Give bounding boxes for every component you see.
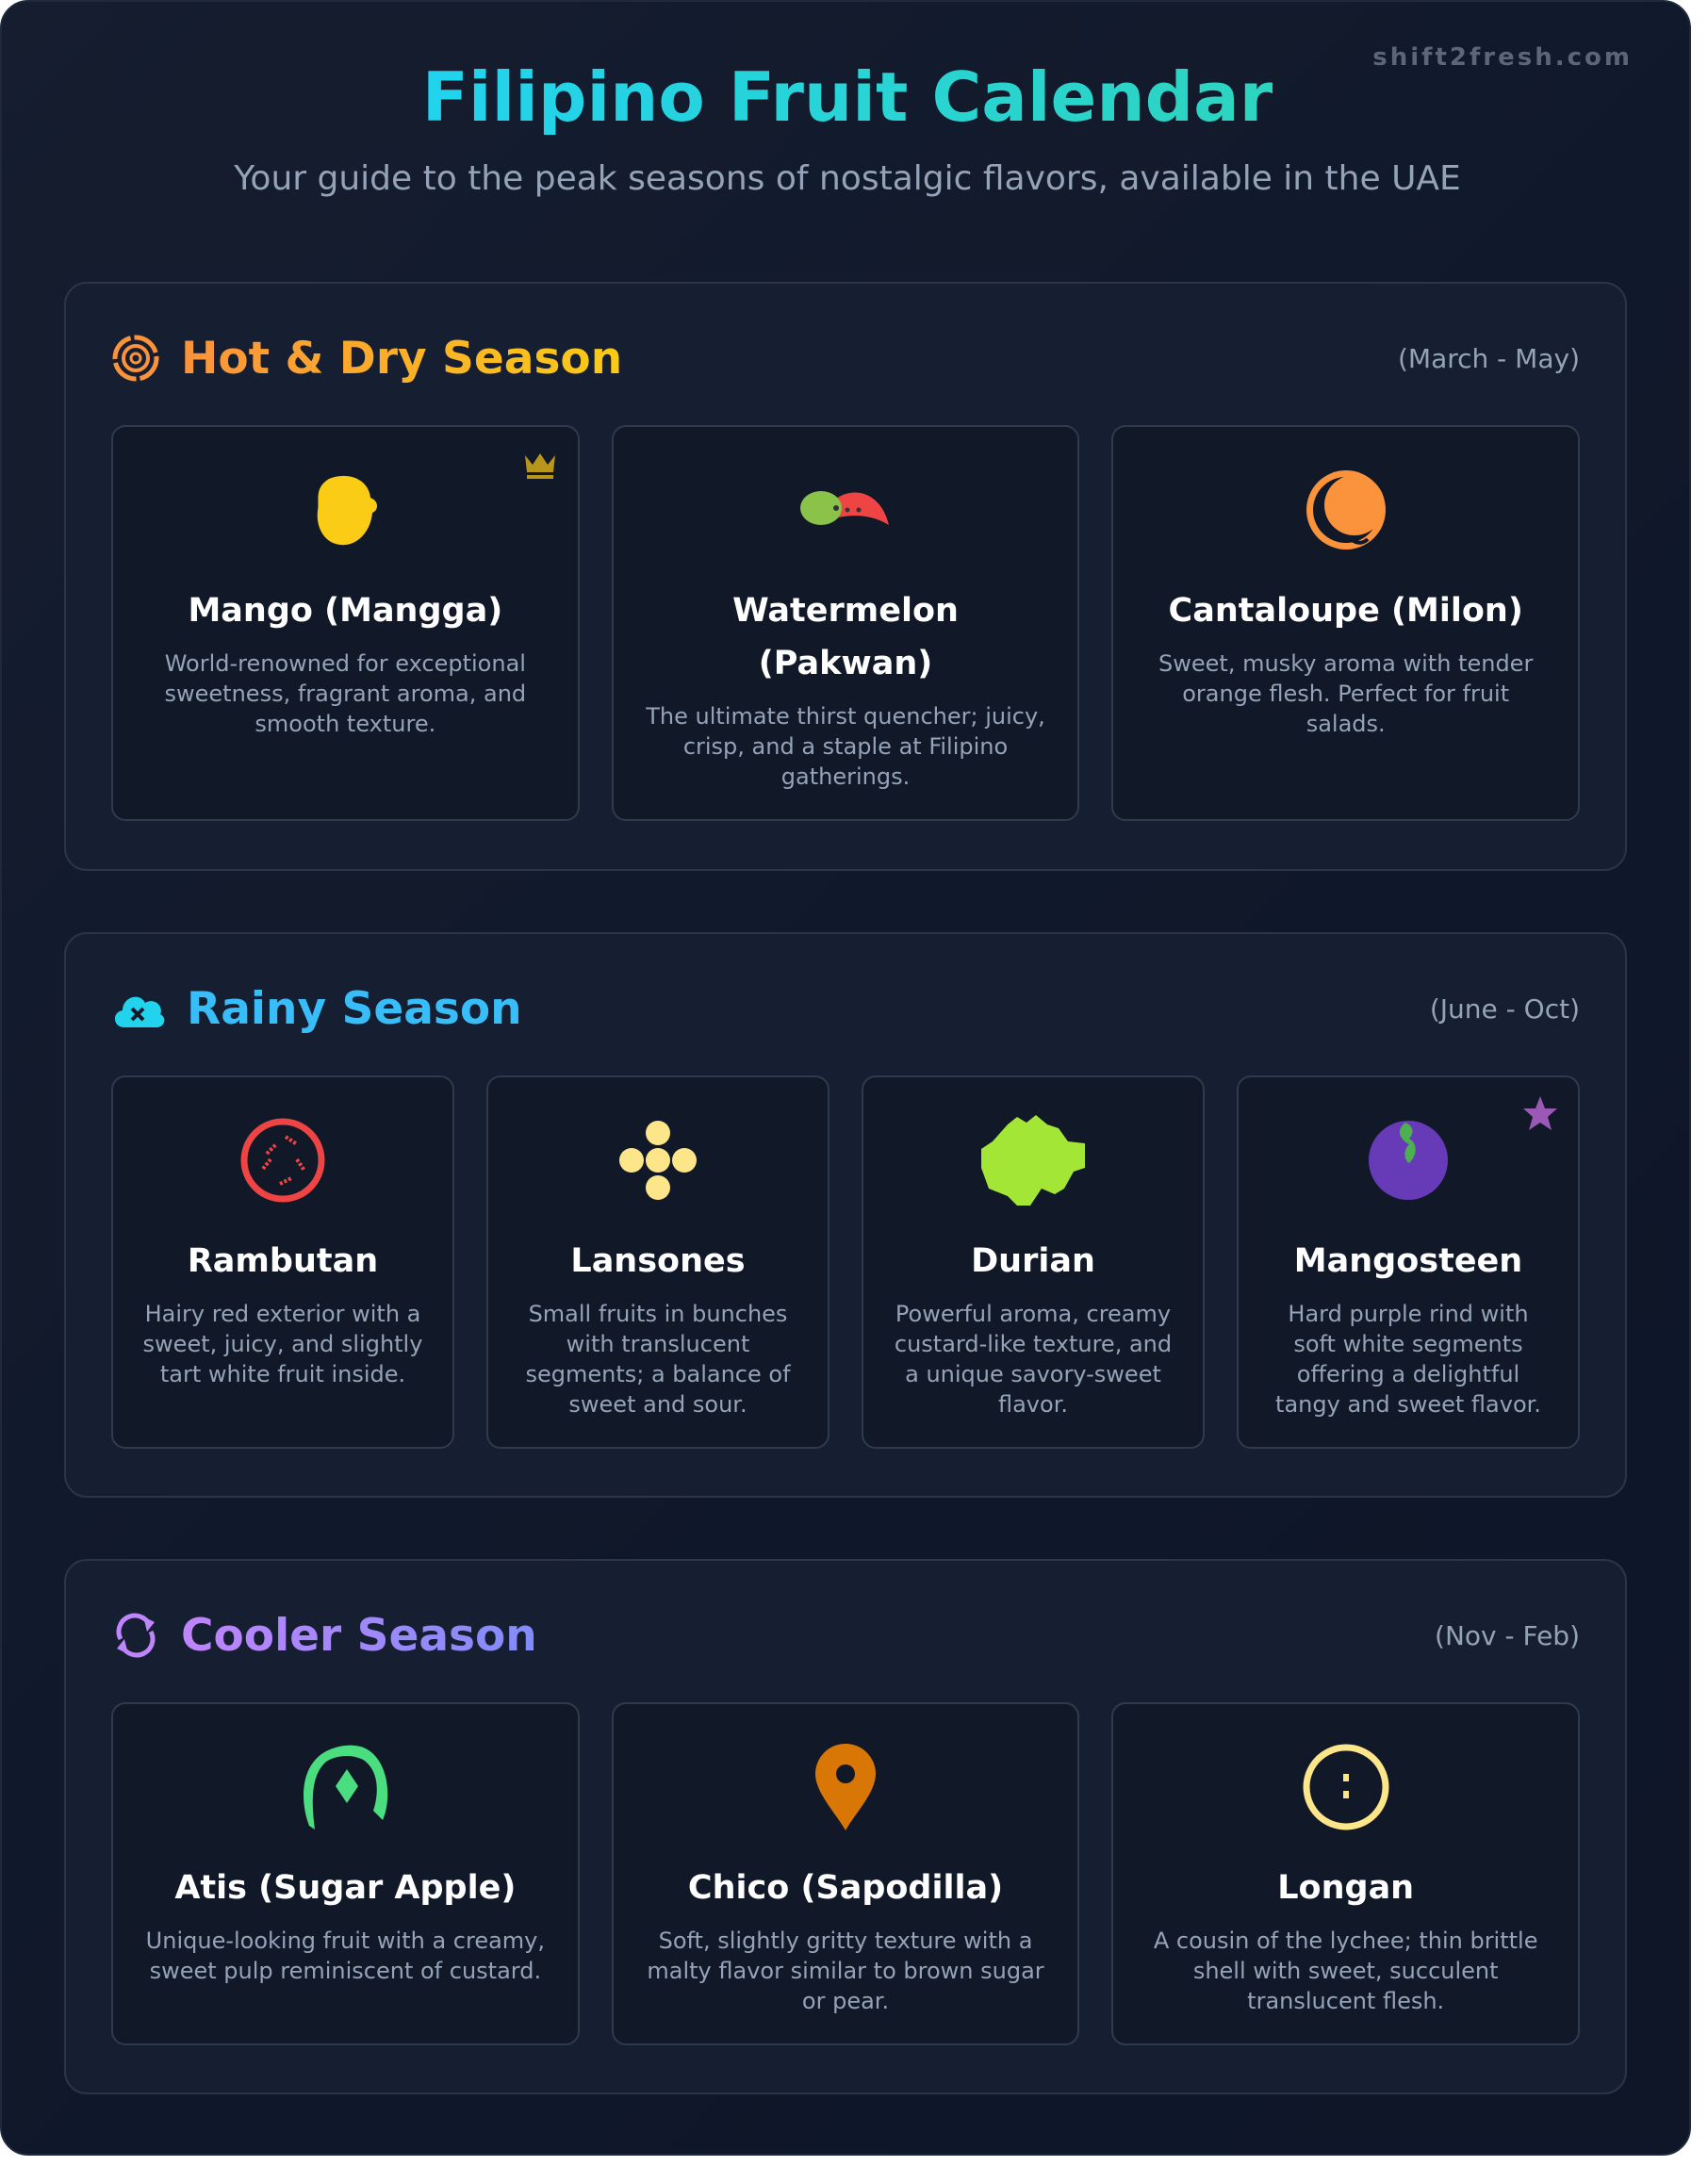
- icon: rambutan: [241, 1118, 324, 1203]
- card: watermelon: (Pakwan): [759, 645, 932, 682]
- panel: rainy season: [64, 932, 1627, 1498]
- card: mangosteen: Hard purple rind with soft white segments offering a delightful tangy and sweet flavor.: [1275, 1301, 1541, 1418]
- brand: shift2fresh.com: [1372, 43, 1633, 72]
- card: mangosteen: [1237, 1075, 1580, 1449]
- card: mangosteen: Mangosteen: [1294, 1242, 1522, 1280]
- card: longan: A cousin of the lychee; thin brittle shell with sweet, succulent translucent flesh.: [1154, 1928, 1537, 2014]
- panel: hot & dry season: [64, 282, 1627, 871]
- section header: hot & dry: (March - May): [1398, 343, 1580, 373]
- card: longan: Longan: [1277, 1869, 1414, 1907]
- section header: cooler: (Nov - Feb): [1435, 1619, 1580, 1651]
- card: durian: Durian: [971, 1242, 1095, 1280]
- card: mango: Mango (Mangga): [188, 592, 502, 630]
- icon: cloud: [115, 997, 164, 1027]
- card: longan: [1111, 1702, 1580, 2045]
- card: durian: [862, 1075, 1205, 1449]
- card: atis: [111, 1702, 580, 2045]
- card: atis: Unique-looking fruit with a creamy, sweet pulp reminiscent of custard.: [146, 1928, 545, 1984]
- card: mango: World-renowned for exceptional sweetness, fragrant aroma, and smooth texture.: [165, 650, 526, 737]
- card: durian: Powerful aroma, creamy custard-like texture, and a unique savory-sweet flavor.: [895, 1301, 1172, 1418]
- icon: star: [1523, 1096, 1557, 1130]
- card: lansones: [486, 1075, 829, 1449]
- card: cantaloupe: Cantaloupe (Milon): [1169, 592, 1523, 630]
- card: chico: Chico (Sapodilla): [688, 1869, 1003, 1907]
- cards row: hot & dry: [111, 425, 1580, 821]
- card: lansones: Lansones: [570, 1242, 746, 1280]
- card: watermelon: The ultimate thirst quencher; juicy, crisp, and a staple at Filipino gatherings.: [646, 703, 1045, 790]
- cards row: rainy: [111, 1075, 1580, 1449]
- card: rambutan: Hairy red exterior with a sweet, juicy, and slightly tart white fruit inside.: [143, 1301, 422, 1387]
- subtitle: Your guide to the peak seasons of nostalgic flavors, available in the UAE: [234, 159, 1461, 198]
- card: watermelon: Watermelon: [732, 592, 959, 630]
- icon: cantaloupe: [1306, 470, 1386, 550]
- icon: lansones: [619, 1121, 697, 1200]
- icon: durian: [981, 1115, 1085, 1206]
- card: lansones: Small fruits in bunches with translucent segments; a balance of sweet and sour.: [525, 1301, 791, 1418]
- card: cantaloupe: [1111, 425, 1580, 821]
- section header: rainy: [115, 982, 1580, 1035]
- card: cantaloupe: Sweet, musky aroma with tender orange flesh. Perfect for fruit salads.: [1158, 650, 1533, 737]
- title: Filipino Fruit Calendar: [422, 57, 1273, 137]
- cards row: cooler: [111, 1702, 1580, 2045]
- card: mango: [111, 425, 580, 821]
- card: watermelon: [612, 425, 1079, 821]
- section header: cooler: [116, 1610, 1580, 1661]
- card: rambutan: Rambutan: [188, 1242, 378, 1280]
- icon: chico: [815, 1744, 876, 1830]
- section header: hot & dry: [113, 332, 1580, 385]
- section header: rainy: (June - Oct): [1430, 993, 1580, 1024]
- icon: sun ring: [113, 336, 158, 381]
- card: rambutan: [111, 1075, 454, 1449]
- icon: mangosteen: [1369, 1121, 1448, 1200]
- icon: watermelon: [800, 491, 889, 525]
- panel: cooler season: [64, 1559, 1627, 2094]
- section header: cooler: Cooler Season: [181, 1610, 537, 1661]
- section header: rainy: Rainy Season: [187, 982, 522, 1035]
- icon: mango: [317, 475, 377, 545]
- section header: hot & dry: Hot & Dry Season: [181, 332, 622, 385]
- card: atis: Atis (Sugar Apple): [174, 1869, 516, 1907]
- icon: longan: [1303, 1744, 1389, 1830]
- icon: atis: [304, 1746, 388, 1830]
- icon: sync arrows: [116, 1614, 155, 1657]
- icon: crown: [525, 453, 555, 479]
- card: chico: [612, 1702, 1079, 2045]
- card: chico: Soft, slightly gritty texture with a malty flavor similar to brown sugar or pear.: [647, 1928, 1044, 2014]
